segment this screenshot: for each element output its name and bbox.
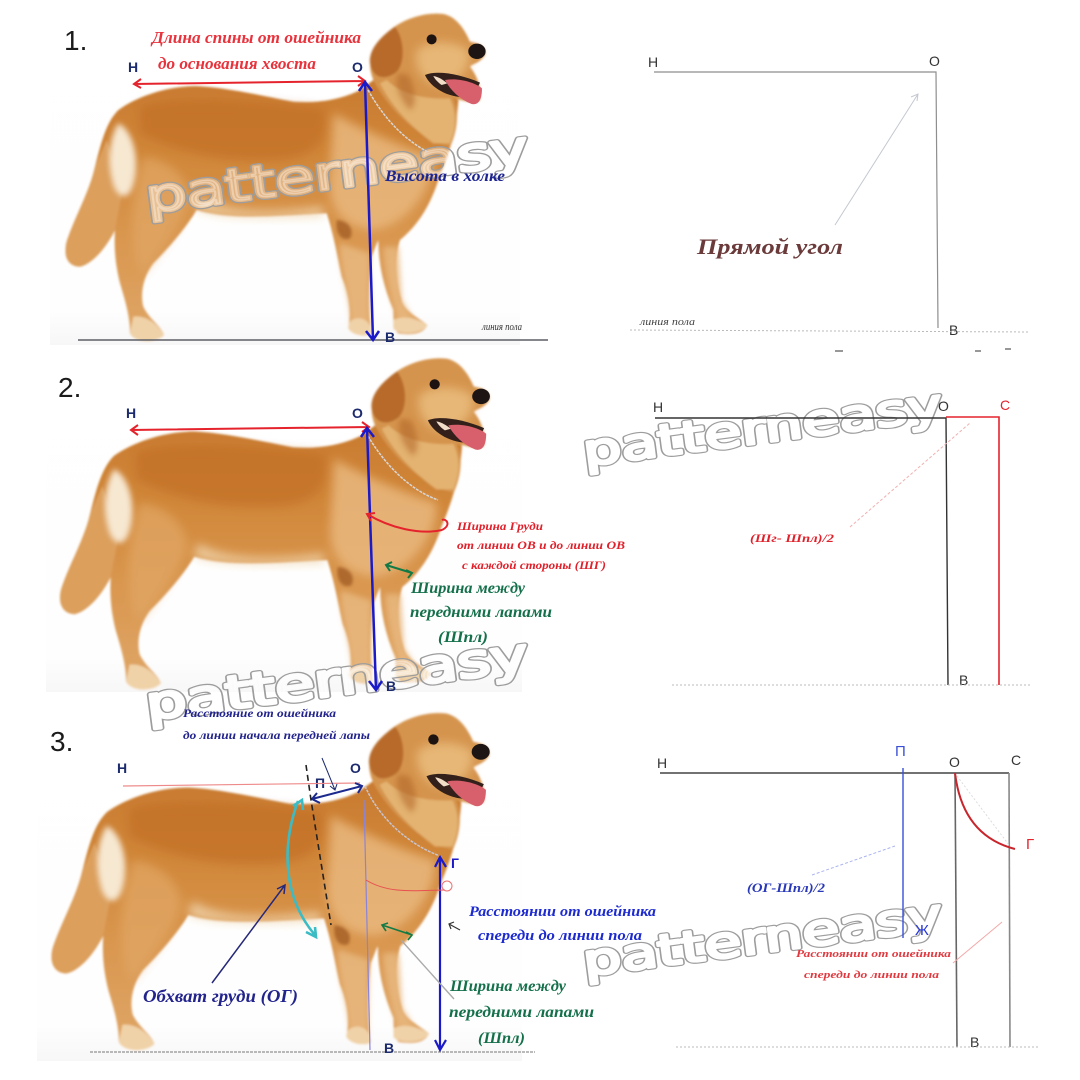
floor label pattern 1: линия пола bbox=[639, 317, 695, 328]
points H O P: О bbox=[350, 760, 361, 776]
labels pattern 2: О bbox=[938, 398, 949, 414]
back length label bbox=[150, 28, 362, 73]
blue front arrow bbox=[435, 857, 446, 1050]
labels pattern 3: Н bbox=[657, 755, 667, 771]
labels pattern 3: О bbox=[949, 754, 960, 770]
chest width label: Ширина Груди bbox=[456, 519, 543, 533]
points H O P: Н bbox=[117, 760, 127, 776]
red distance label: спереди до линии пола bbox=[804, 969, 940, 981]
red arrow back 2 bbox=[131, 422, 369, 435]
points H O P: В bbox=[384, 1040, 394, 1056]
collar line 1 bbox=[368, 90, 428, 152]
dog photo 3 bbox=[37, 700, 522, 1061]
panel: step 1 pattern bbox=[630, 53, 1030, 351]
black small arrow bbox=[449, 922, 460, 930]
formula arrow 3 bbox=[812, 846, 895, 875]
labels pattern 3: Г bbox=[1026, 836, 1034, 853]
black lines 2 bbox=[655, 418, 948, 685]
number 1: 1. bbox=[64, 25, 87, 56]
points H O B: О bbox=[352, 405, 363, 421]
back length label: Длина спины от ошейника bbox=[150, 28, 362, 47]
purple vertical bbox=[364, 800, 370, 1050]
labels pattern 3: П bbox=[895, 743, 906, 760]
labels pattern 2: В bbox=[959, 672, 968, 688]
red distance label bbox=[796, 948, 952, 981]
pattern labels 1 bbox=[648, 53, 958, 338]
points H O B: В bbox=[386, 678, 396, 694]
green label bbox=[410, 580, 552, 646]
red arrow back length bbox=[134, 76, 365, 88]
chest girth label: Обхват груди (ОГ) bbox=[143, 986, 298, 1007]
armhole curve bbox=[955, 773, 1015, 849]
green arrow bbox=[386, 562, 412, 578]
red lines 2 bbox=[946, 417, 999, 685]
pattern lines 1 bbox=[654, 72, 938, 328]
pattern labels 1: О bbox=[929, 53, 940, 69]
red pointer bbox=[953, 922, 1002, 963]
floor line 1 bbox=[78, 339, 548, 341]
black dashed line bbox=[306, 765, 331, 925]
panel: step 1 annotations bbox=[64, 25, 548, 345]
navy double arrow bbox=[312, 783, 362, 803]
chest width label: с каждой стороны (ШГ) bbox=[462, 558, 606, 572]
watermark top right bbox=[558, 349, 983, 515]
dog photo 1 bbox=[50, 2, 520, 345]
green label 3: (Шпл) bbox=[478, 1030, 525, 1047]
red chest curve bbox=[366, 880, 445, 891]
floor dotted 2 bbox=[672, 684, 1030, 686]
thin red back line bbox=[123, 783, 360, 786]
center vertical bbox=[955, 773, 957, 1047]
blue arrow height 2 bbox=[361, 428, 382, 690]
floor dotted 3 bbox=[676, 1046, 1040, 1048]
points H and O: О bbox=[352, 59, 363, 75]
chest girth pointer bbox=[212, 885, 285, 983]
cyan arc arrow bbox=[288, 800, 316, 937]
red distance label: Расстоянии от ошейника bbox=[796, 948, 952, 960]
chest width arrow bbox=[367, 513, 447, 532]
points H O P bbox=[117, 760, 459, 1056]
blue vertical bbox=[902, 768, 904, 938]
points H O B bbox=[126, 405, 396, 694]
right vertical bbox=[1009, 773, 1010, 1047]
green label 3 bbox=[449, 978, 594, 1047]
top line 3 bbox=[660, 772, 1009, 774]
floor dotted 1 bbox=[630, 330, 1030, 332]
pattern labels 1: Н bbox=[648, 54, 658, 70]
distance to leg label: Расстояние от ошейника bbox=[183, 706, 336, 720]
cropped text remnants bbox=[835, 349, 1011, 351]
labels pattern 2: Н bbox=[653, 399, 663, 415]
collar line 3 bbox=[365, 786, 440, 856]
labels pattern 2: С bbox=[1000, 397, 1010, 413]
panel: step 2 pattern bbox=[653, 397, 1030, 688]
formula 2: (Шг- Шпл)/2 bbox=[750, 531, 834, 545]
dashed guide bbox=[957, 776, 1009, 845]
dog photo 2 bbox=[46, 347, 522, 692]
labels pattern 3: Ж bbox=[915, 922, 929, 939]
points H O B: Н bbox=[126, 405, 136, 421]
watermark bottom right bbox=[558, 859, 983, 1025]
grey pointer bbox=[401, 940, 454, 999]
distance to leg label bbox=[183, 706, 370, 742]
labels pattern 2 bbox=[653, 397, 1010, 688]
watermark bottom left bbox=[119, 596, 571, 772]
floor dotted 3 bbox=[90, 1051, 535, 1053]
green label: передними лапами bbox=[410, 604, 552, 621]
floor line label: линия пола bbox=[481, 322, 522, 333]
height label: Высота в холке bbox=[384, 168, 505, 185]
labels pattern 3 bbox=[657, 743, 1034, 1050]
panel: step 2 annotations bbox=[58, 372, 625, 694]
points H O P: Г bbox=[451, 855, 459, 871]
back length label: до основания хвоста bbox=[158, 54, 317, 73]
number 2: 2. bbox=[58, 372, 81, 403]
pattern labels 1: В bbox=[949, 322, 958, 338]
panel: step 3 pattern bbox=[657, 743, 1040, 1050]
labels pattern 3: С bbox=[1011, 752, 1021, 768]
front distance label: Расстоянии от ошейника bbox=[469, 904, 657, 920]
green label 3: передними лапами bbox=[449, 1004, 594, 1021]
panel: step 3 annotations bbox=[50, 706, 657, 1056]
formula 3: (ОГ-Шпл)/2 bbox=[747, 880, 826, 895]
labels pattern 3: В bbox=[970, 1034, 979, 1050]
label pointer arrow bbox=[322, 758, 337, 790]
green label 3: Ширина между bbox=[449, 978, 567, 995]
number 3: 3. bbox=[50, 726, 73, 757]
points H O P: П bbox=[315, 775, 325, 791]
watermark top left bbox=[119, 89, 571, 265]
right angle label: Прямой угол bbox=[696, 234, 843, 259]
right angle arrow bbox=[835, 94, 918, 225]
distance to leg label: до линии начала передней лапы bbox=[183, 728, 370, 742]
chest width label: от линии ОВ и до линии ОВ bbox=[457, 538, 625, 552]
front distance label: спереди до линии пола bbox=[478, 928, 643, 944]
chest width label bbox=[456, 519, 625, 572]
points H and O: Н bbox=[128, 59, 138, 75]
front distance label bbox=[469, 904, 657, 944]
blue arrow height bbox=[359, 82, 379, 340]
green label: (Шпл) bbox=[438, 629, 488, 646]
points H and O bbox=[128, 59, 395, 345]
points H and O: В bbox=[385, 329, 395, 345]
green label: Ширина между bbox=[410, 580, 526, 597]
formula arrow 2 bbox=[850, 423, 970, 527]
green arrow 3 bbox=[382, 923, 412, 940]
collar line 2 bbox=[368, 436, 438, 500]
